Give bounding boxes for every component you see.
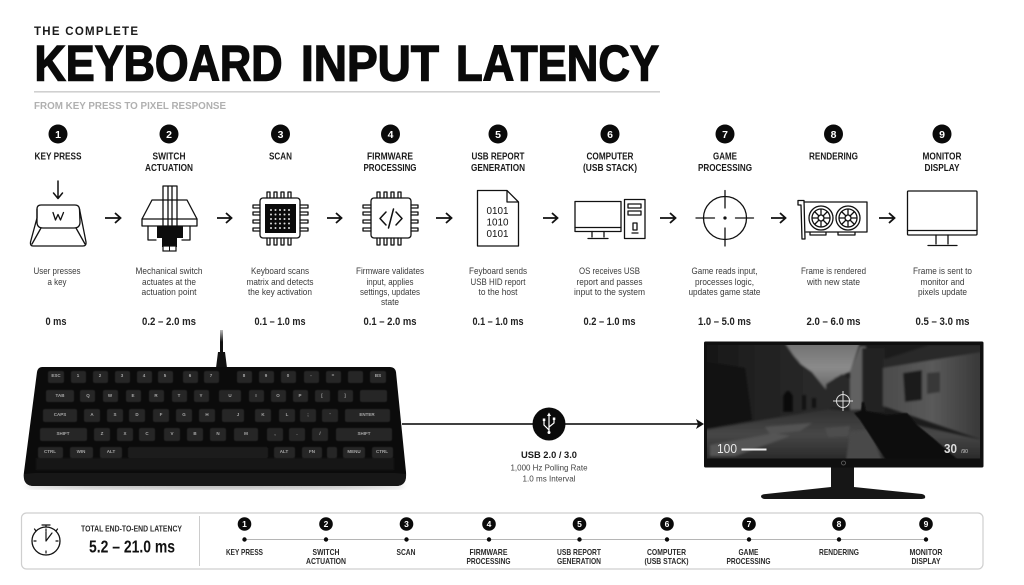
timeline step 2: 2 — [324, 519, 329, 529]
timeline step 1: 1 — [242, 519, 247, 529]
key rows: ESC — [51, 373, 61, 378]
icon: desktop computer — [575, 200, 645, 238]
description 8: Frame is rendered — [801, 266, 866, 277]
key rows: 7 — [210, 373, 213, 378]
title: KEYBOARD — [34, 36, 282, 92]
key rows: H — [205, 412, 209, 417]
usb connection text: 1.0 ms Interval — [522, 474, 576, 484]
badge 9 — [932, 124, 952, 144]
hud health — [717, 441, 766, 456]
hud ammo — [944, 441, 968, 456]
key rows: CTRL — [376, 449, 388, 454]
timeline — [226, 517, 942, 566]
heading 9: MONITOR — [922, 152, 962, 162]
description 6: report and passes — [576, 277, 643, 288]
key rows: SHIFT — [358, 431, 371, 436]
icon: stopwatch — [32, 525, 60, 555]
timeline step 4: 4 — [487, 519, 492, 529]
key rows: MENU — [347, 449, 361, 454]
timeline step 5: USB REPORT — [557, 547, 602, 557]
badge 8: 8 — [831, 129, 837, 141]
key rows: N — [216, 431, 220, 436]
crosshair overlay — [833, 391, 853, 411]
arrow 4 to 5 — [436, 213, 452, 223]
usb connection line with arrow — [402, 419, 704, 429]
timeline step 5: 5 — [577, 519, 582, 529]
badge 9: 9 — [939, 129, 945, 141]
badge 7 — [716, 124, 734, 144]
heading 5: GENERATION — [471, 163, 525, 174]
icon: scan chip — [253, 192, 308, 245]
key rows: 9 — [265, 373, 268, 378]
key rows: 6 — [189, 373, 192, 378]
key rows: A — [90, 412, 94, 417]
key rows: FN — [309, 449, 315, 454]
heading 2 — [145, 152, 193, 174]
description 6: OS receives USB — [579, 266, 640, 277]
timeline step 7 — [726, 517, 771, 566]
heading 6: (USB STACK) — [583, 163, 637, 174]
description 8: with new state — [806, 277, 860, 288]
icon: data document — [478, 190, 518, 246]
heading 7 — [698, 152, 752, 174]
badge 5: 5 — [495, 129, 501, 141]
key rows: T — [178, 393, 181, 398]
description 8 — [801, 266, 866, 288]
key rows: [ — [321, 393, 323, 398]
usb connection text — [510, 450, 588, 484]
key rows: TAB — [56, 393, 65, 398]
description 5 — [469, 266, 527, 298]
timeline step 4 — [466, 517, 511, 566]
timeline step 2: ACTUATION — [306, 556, 346, 566]
description 6 — [574, 266, 645, 298]
key rows: ; — [307, 412, 309, 417]
key rows: - — [310, 373, 312, 378]
key rows: 5 — [164, 373, 167, 378]
heading 9 — [922, 152, 962, 174]
key rows: 0 — [287, 373, 290, 378]
timeline step 9: DISPLAY — [912, 556, 941, 566]
icon: data document: 0101 — [486, 206, 509, 217]
key rows: BS — [375, 373, 381, 378]
description 7: processes logic, — [695, 277, 754, 288]
description 6: input to the system — [574, 287, 645, 298]
step 5: usb report generation — [469, 124, 527, 328]
timeline step 6: 6 — [665, 519, 670, 529]
key rows: / — [319, 431, 321, 436]
key rows: D — [135, 412, 139, 417]
total latency bar — [22, 513, 983, 569]
latency 9: 0.5 – 3.0 ms — [916, 316, 970, 328]
timeline step 5: GENERATION — [557, 556, 601, 566]
badge 3: 3 — [278, 129, 284, 141]
key rows: L — [286, 412, 289, 417]
timeline step 2: SWITCH — [312, 547, 340, 557]
monitor stand — [761, 466, 925, 499]
description 9 — [913, 266, 972, 298]
badge 5 — [488, 124, 508, 144]
arrow 1 to 2 — [105, 213, 120, 223]
description 1: a key — [48, 277, 67, 288]
arrow 2 to 3 — [217, 213, 232, 223]
total value: 5.2 – 21.0 ms — [89, 536, 175, 556]
timeline step 6: COMPUTER — [647, 547, 686, 557]
description 2 — [136, 266, 202, 298]
description 2: actuation point — [142, 287, 197, 298]
badge 7: 7 — [722, 129, 728, 141]
heading 4 — [364, 152, 417, 174]
key rows: ALT — [107, 449, 115, 454]
key rows: V — [170, 431, 174, 436]
description 9: pixels update — [918, 287, 967, 298]
key rows: ALT — [280, 449, 288, 454]
key rows: Q — [86, 393, 90, 398]
timeline step 7: 7 — [747, 519, 752, 529]
latency 7: 1.0 – 5.0 ms — [698, 316, 751, 328]
badge 6: 6 — [607, 129, 613, 141]
title: LATENCY — [456, 36, 659, 92]
description 2: Mechanical switch — [136, 266, 202, 277]
key rows: O — [276, 393, 280, 398]
description 9: Frame is sent to — [913, 266, 972, 277]
hud ammo: 30 — [944, 441, 957, 456]
timeline step 3: 3 — [404, 519, 409, 529]
key rows: M — [244, 431, 248, 436]
timeline step 8: RENDERING — [819, 547, 859, 557]
icon: data document: 1010 — [486, 218, 509, 228]
description 4: input, applies — [366, 277, 414, 288]
arrow 7 to 8 — [771, 213, 786, 223]
keyboard illustration — [24, 330, 406, 489]
hud ammo: /90 — [961, 449, 968, 455]
key rows: P — [298, 393, 302, 398]
usb connection text: USB 2.0 / 3.0 — [521, 450, 577, 461]
description 7: Game reads input, — [692, 266, 758, 277]
monitor frame — [704, 342, 984, 468]
key rows: W — [108, 393, 113, 398]
key rows: S — [113, 412, 117, 417]
arrow 3 to 4 — [327, 213, 342, 223]
badge 2: 2 — [166, 129, 172, 141]
usb connection text: 1,000 Hz Polling Rate — [510, 462, 588, 472]
arrow 6 to 7 — [660, 213, 676, 223]
latency 6: 0.2 – 1.0 ms — [584, 316, 636, 328]
description 3 — [246, 266, 314, 298]
key rows: Y — [199, 393, 203, 398]
usb connection badge — [532, 408, 566, 440]
key rows: SHIFT — [56, 431, 70, 436]
badge 2 — [160, 124, 178, 144]
title — [34, 36, 659, 92]
description 4 — [356, 266, 424, 308]
keyboard cable — [216, 330, 227, 368]
arrow 8 to 9 — [879, 213, 894, 223]
timeline step 7: GAME — [738, 547, 759, 557]
timeline step 4: PROCESSING — [466, 556, 511, 566]
heading 6: COMPUTER — [586, 152, 634, 162]
title: INPUT — [301, 36, 439, 92]
timeline step 7: PROCESSING — [726, 556, 771, 566]
keyboard body — [24, 367, 406, 486]
timeline step 5 — [557, 517, 602, 566]
timeline step 9 — [910, 517, 942, 566]
timeline step 8 — [819, 517, 859, 557]
timeline step 4: FIRMWARE — [470, 547, 508, 557]
key rows: R — [154, 393, 158, 398]
key rows: ] — [344, 393, 346, 398]
description 4: state — [381, 297, 399, 308]
latency 2: 0.2 – 2.0 ms — [142, 316, 196, 328]
description 4: settings, updates — [360, 287, 420, 298]
key rows: K — [261, 412, 265, 417]
heading 1: KEY PRESS — [34, 152, 82, 162]
key rows: ENTER — [359, 412, 375, 417]
key rows: E — [131, 393, 135, 398]
latency 3: 0.1 – 1.0 ms — [254, 316, 306, 328]
heading 6 — [583, 152, 637, 174]
badge 4: 4 — [388, 129, 394, 141]
description 5: Feyboard sends — [469, 266, 527, 277]
monitor with game scene — [704, 342, 984, 499]
latency 4: 0.1 – 2.0 ms — [364, 316, 416, 328]
icon: graphics card — [798, 200, 867, 239]
step 8: rendering — [798, 124, 867, 328]
step 9: monitor display — [908, 124, 977, 328]
heading 5 — [471, 152, 525, 174]
latency 8: 2.0 – 6.0 ms — [806, 316, 860, 328]
heading 7: PROCESSING — [698, 163, 752, 174]
description 1 — [34, 266, 81, 288]
timeline step 8: 8 — [837, 519, 842, 529]
description 4: Firmware validates — [356, 266, 424, 277]
icon: monitor — [908, 191, 977, 246]
key rows — [36, 371, 394, 470]
description 2: actuates at the — [142, 277, 196, 288]
description 5: USB HID report — [470, 277, 526, 288]
description 7 — [688, 266, 760, 298]
key rows: B — [193, 431, 197, 436]
heading 9: DISPLAY — [924, 163, 960, 174]
badge 6 — [600, 124, 620, 144]
key rows: F — [160, 412, 163, 417]
arrow 5 to 6 — [543, 213, 558, 223]
key rows: 1 — [77, 373, 80, 378]
timeline step 3: SCAN — [396, 547, 416, 557]
timeline step 3 — [396, 517, 416, 557]
heading 4: PROCESSING — [364, 163, 417, 174]
timeline step 9: 9 — [924, 519, 929, 529]
step 1: key press — [30, 124, 86, 328]
subtitle: FROM KEY PRESS TO PIXEL RESPONSE — [34, 100, 226, 112]
step 3: scan — [246, 124, 314, 328]
badge 1: 1 — [55, 129, 61, 141]
description 7: updates game state — [688, 287, 760, 298]
badge 8 — [824, 124, 843, 144]
heading 5: USB REPORT — [472, 152, 524, 162]
key rows: X — [123, 431, 127, 436]
timeline step 1: KEY PRESS — [226, 547, 263, 557]
heading 8: RENDERING — [809, 152, 858, 162]
icon: data document: 0101 — [486, 229, 509, 240]
icon: firmware chip — [363, 192, 418, 245]
timeline step 1 — [226, 517, 263, 557]
description 5: to the host — [478, 287, 518, 298]
key rows: 2 — [99, 373, 102, 378]
key rows: WIN — [77, 449, 85, 454]
hud health: 100 — [717, 441, 737, 456]
badge 3 — [271, 124, 290, 144]
description 3: Keyboard scans — [251, 266, 309, 277]
description 1: User presses — [34, 266, 81, 277]
key rows: . — [296, 431, 298, 436]
eyebrow heading: THE COMPLETE — [34, 26, 138, 38]
step 4: firmware processing — [356, 124, 424, 328]
latency 1: 0 ms — [46, 316, 66, 328]
icon: crosshair — [696, 190, 754, 246]
key rows: 3 — [121, 373, 124, 378]
key rows: CTRL — [44, 449, 56, 454]
description 3: matrix and detects — [246, 277, 314, 288]
description 9: monitor and — [920, 277, 964, 288]
timeline step 2 — [306, 517, 346, 566]
key rows: C — [145, 431, 149, 436]
key rows: CAPS — [54, 412, 66, 417]
key rows: U — [228, 393, 232, 398]
latency 5: 0.1 – 1.0 ms — [472, 316, 524, 328]
step 2: switch actuation — [136, 124, 202, 328]
key rows: Z — [101, 431, 104, 436]
timeline step 6: (USB STACK) — [644, 556, 689, 566]
heading 2: SWITCH — [152, 152, 186, 162]
key rows: , — [274, 431, 276, 436]
icon: keycap with arrow — [30, 181, 86, 246]
key rows: 8 — [243, 373, 246, 378]
key rows: ' — [329, 412, 331, 417]
key rows: J — [237, 412, 240, 417]
timeline step 9: MONITOR — [910, 547, 942, 557]
description 3: the key activation — [248, 287, 312, 298]
key rows: 4 — [143, 373, 146, 378]
icon: mechanical switch — [142, 186, 197, 251]
key rows: G — [182, 412, 186, 417]
key rows: I — [255, 393, 257, 398]
heading 7: GAME — [713, 152, 737, 162]
heading 2: ACTUATION — [145, 163, 193, 174]
heading 3: SCAN — [269, 152, 292, 162]
badge 4 — [381, 124, 400, 144]
game screenshot — [707, 345, 980, 458]
timeline step 6 — [644, 517, 689, 566]
total label: TOTAL END-TO-END LATENCY — [81, 524, 182, 534]
panel frame — [22, 513, 983, 569]
step 7: game processing — [688, 124, 760, 328]
heading 4: FIRMWARE — [367, 152, 413, 162]
step 6: computer usb stack — [574, 124, 645, 328]
badge 1 — [48, 124, 68, 144]
key rows: = — [332, 373, 335, 378]
